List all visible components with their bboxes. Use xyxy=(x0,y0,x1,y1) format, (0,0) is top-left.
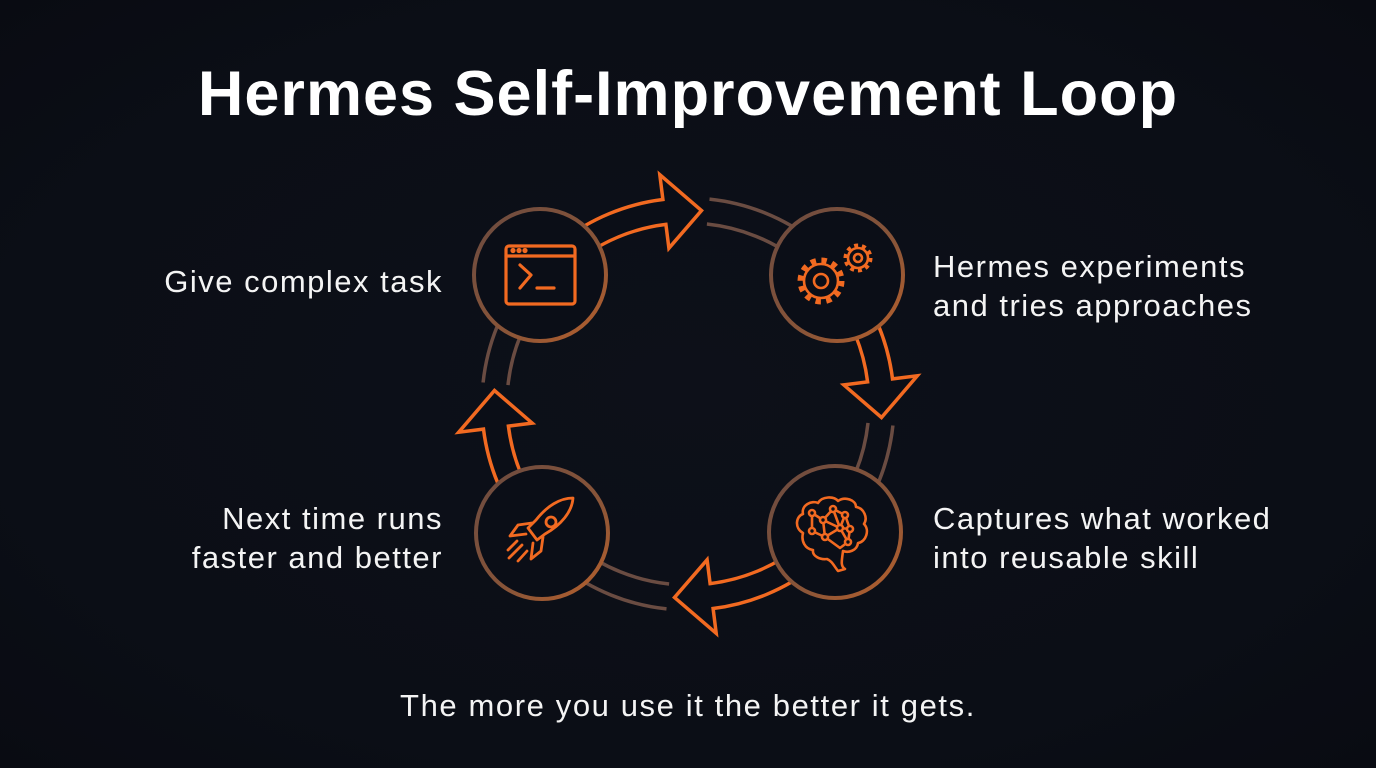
label: experiments xyxy=(933,249,1253,323)
label: next time xyxy=(192,501,443,575)
icon: rocket xyxy=(508,498,573,561)
label: experiments: Hermes experiments xyxy=(933,249,1246,284)
label: next time: Next time runs xyxy=(222,501,443,536)
icon: gears xyxy=(801,246,870,301)
label: captures xyxy=(933,501,1271,575)
footer tagline: The more you use it the better it gets. xyxy=(400,688,976,723)
node: gears xyxy=(771,209,903,341)
label: experiments: and tries approaches xyxy=(933,288,1253,323)
icon: terminal xyxy=(506,246,575,304)
label: captures: Captures what worked xyxy=(933,501,1271,536)
node: terminal xyxy=(474,209,606,341)
node: brain xyxy=(769,466,901,598)
node: rocket xyxy=(476,467,608,599)
label: give complex task: Give complex task xyxy=(164,264,443,299)
label: next time: faster and better xyxy=(192,540,443,575)
icon: brain xyxy=(797,497,867,571)
title: Hermes Self-Improvement Loop xyxy=(198,59,1178,129)
arrows and connectors xyxy=(459,175,917,633)
label: captures: into reusable skill xyxy=(933,540,1199,575)
